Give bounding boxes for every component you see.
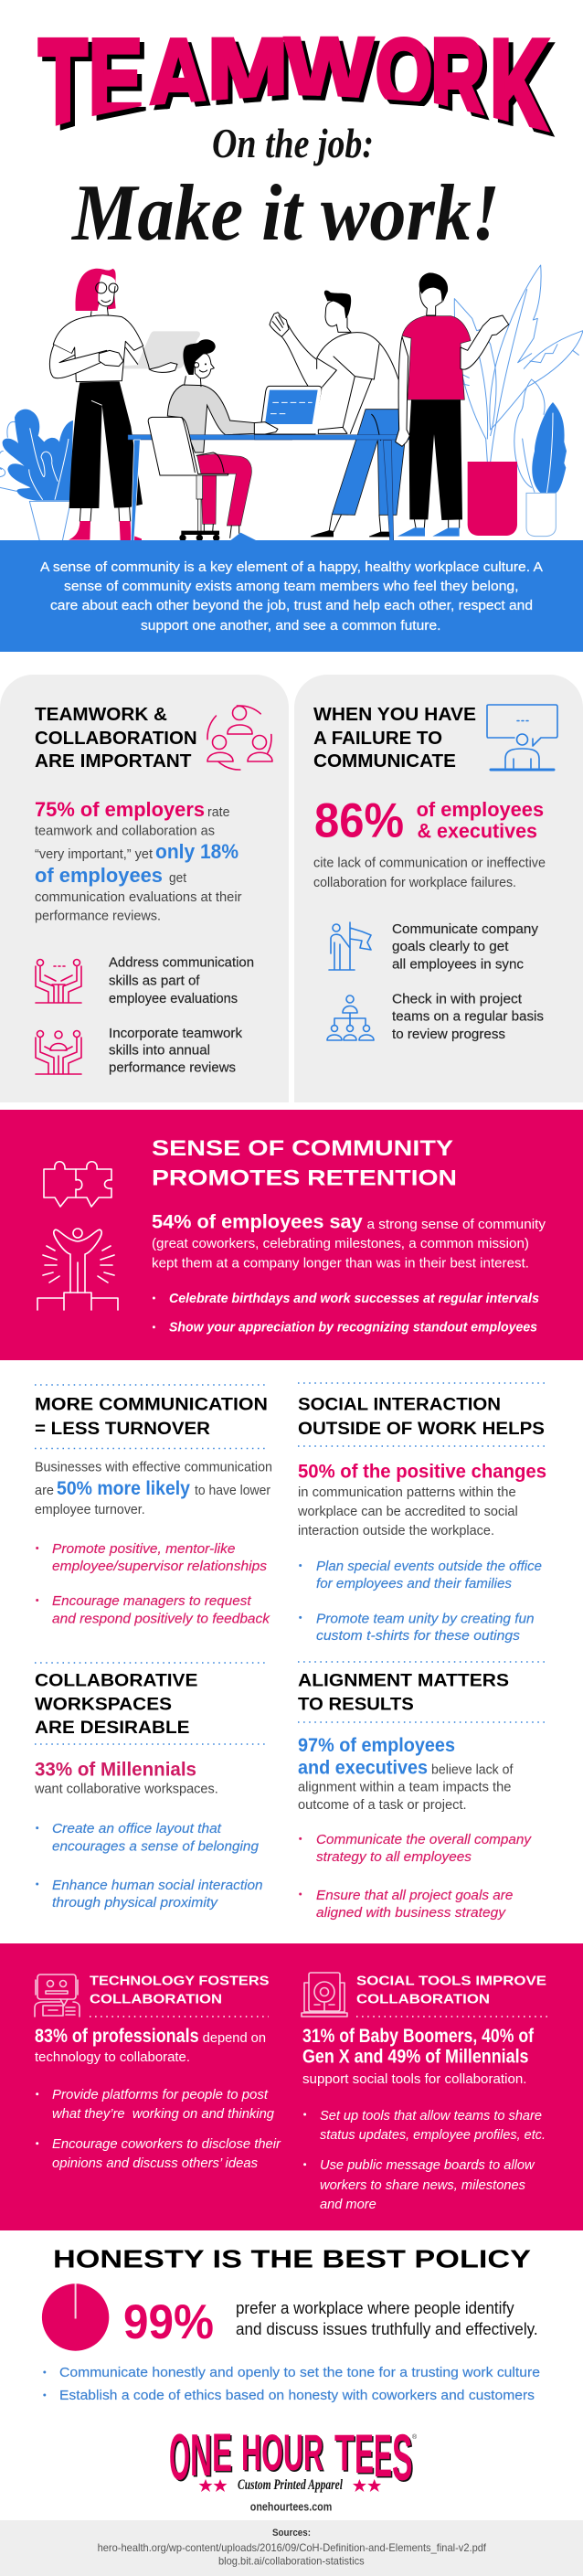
stat: 86 percent: cite lack of communication or ineffective — [313, 857, 546, 871]
stat: 33 percent of millennials — [34, 1760, 218, 1797]
bullets: plan and promote: for employees and their families — [316, 1577, 512, 1591]
stat: 99 percent: 99% — [123, 2295, 214, 2349]
panel: teamwork and collaboration — [0, 675, 289, 1102]
chart: 99 percent pie — [42, 2283, 109, 2351]
stat: 33 percent of millennials: want collaborative workspaces. — [34, 1783, 218, 1797]
bullets: set up and use — [303, 2108, 546, 2212]
heading: collaborative workspaces: ARE DESIRABLE — [35, 1719, 190, 1738]
stat: 75 percent of employers: of employees — [35, 864, 163, 887]
website url: onehourtees.com — [250, 2500, 332, 2514]
heading: alignment matters — [298, 1672, 509, 1715]
stat: 50 percent more likely: to have lower — [195, 1484, 270, 1498]
intro text: support one another, and see a common future. — [141, 619, 440, 633]
icon: celebrating person — [37, 1229, 118, 1310]
bullet text: check in — [392, 993, 544, 1042]
title: TEAMWORK: W — [290, 25, 377, 123]
bullets: celebrate and show — [153, 1291, 539, 1336]
logo: one hour tees: E — [214, 2424, 234, 2485]
heading: social tools — [356, 1975, 546, 2007]
panel: sense of community — [0, 1110, 583, 1360]
stat: 97 percent: and executives — [298, 1758, 428, 1779]
stat: 54 percent: a strong sense of community — [367, 1218, 546, 1232]
section: more communication less turnover — [35, 1385, 272, 1626]
title: TEAMWORK: M — [207, 20, 289, 121]
logo: one hour tees: S — [393, 2424, 414, 2496]
person: leaning man — [270, 291, 405, 537]
bullets: create and enhance — [36, 1822, 263, 1911]
heading: technology fosters: TECHNOLOGY FOSTERS — [90, 1975, 270, 1989]
bullets: celebrate and show: Show your appreciation by recognizing standout employees — [169, 1320, 537, 1336]
heading: alignment matters: TO RESULTS — [298, 1696, 414, 1715]
bullets: honesty: Establish a code of ethics based on honesty with coworkers and customers — [59, 2388, 535, 2403]
section: alignment matters — [298, 1662, 548, 1921]
footer: sources: hero-health.org/wp-content/uploads/2016/09/CoH-Definition-and-Elements_final-v2.pdf — [98, 2541, 487, 2554]
heading: failure: COMMUNICATE — [313, 751, 456, 772]
stat: 97 percent: 97% of employees — [298, 1735, 455, 1756]
bullet text: communicate company goals: all employees in sync — [392, 958, 524, 973]
bullets: celebrate and show: Celebrate birthdays and work successes at regular intervals — [169, 1291, 539, 1306]
logo: one hour tees: ® — [412, 2433, 418, 2441]
icon: robot — [35, 1975, 80, 2017]
stat: 50 percent more likely: Businesses with effective communication — [35, 1460, 272, 1474]
stat: 75 percent of employers: teamwork and collaboration as — [35, 825, 215, 839]
bullets: honesty — [43, 2365, 540, 2403]
section: social interaction — [297, 1383, 548, 1644]
heading: teamwork — [35, 705, 197, 772]
bullets: communicate and ensure: strategy to all employees — [316, 1850, 472, 1865]
title: TEAMWORK: R — [430, 16, 485, 142]
heading: more communication: MORE COMMUNICATION — [35, 1395, 268, 1415]
heading: social interaction: OUTSIDE OF WORK HELPS — [298, 1420, 545, 1439]
heading: social interaction: SOCIAL INTERACTION — [298, 1395, 501, 1415]
heading: teamwork: COLLABORATION — [35, 729, 197, 749]
stat: 54 percent: 54% of employees say — [152, 1211, 363, 1232]
heading: failure: WHEN YOU HAVE — [313, 705, 476, 725]
title: TEAMWORK: E — [92, 19, 147, 145]
heading: social tools: SOCIAL TOOLS IMPROVE — [356, 1975, 546, 1989]
heading: more communication: = LESS TURNOVER — [35, 1420, 210, 1439]
stat: 86 percent: collaboration for workplace failures. — [313, 876, 516, 890]
heading: alignment matters: ALIGNMENT MATTERS — [298, 1672, 509, 1691]
intro band — [0, 540, 583, 652]
stat: baby boomers gen x millennials — [302, 2026, 535, 2087]
stat: 50 percent more likely — [35, 1460, 272, 1517]
stat: baby boomers gen x millennials: Gen X and 49% of Millennials — [302, 2047, 528, 2068]
stat: 97 percent: alignment within a team impacts the — [298, 1781, 511, 1795]
bullets: promote and encourage: and respond positively to feedback — [52, 1612, 270, 1626]
bullets: communicate and ensure: Communicate the overall company — [316, 1833, 532, 1847]
heading: collaborative workspaces — [35, 1672, 197, 1738]
heading: collaborative workspaces: WORKSPACES — [35, 1696, 172, 1715]
stat: 86 percent: 86% — [314, 793, 404, 848]
logo: one hour tees: T — [336, 2424, 356, 2483]
bullet text: address communication: Address communication — [109, 956, 254, 971]
logo: one hour tees: E — [356, 2424, 375, 2486]
bullets: communicate and ensure: aligned with business strategy — [316, 1906, 506, 1921]
title: TEAMWORK: A — [153, 24, 213, 134]
stat: 54 percent — [152, 1211, 546, 1272]
icon: puzzle — [44, 1162, 111, 1207]
intro text: A sense of community is a key element of a happy, healthy workplace culture. A — [40, 560, 543, 575]
stat: 75 percent of employers: performance reviews. — [35, 909, 161, 923]
title: TEAMWORK: K — [490, 12, 549, 164]
stat: 54 percent: (great coworkers, celebrating milestones, a common mission) — [152, 1237, 529, 1251]
bullets: promote and encourage — [36, 1542, 270, 1626]
stat: 50 percent of positive changes: in communication patterns within the — [298, 1485, 516, 1500]
bullets: plan and promote: Promote team unity by creating fun — [316, 1612, 535, 1626]
stat: 83 percent: 83% of professionals — [35, 2026, 199, 2047]
panel: technology and social tools — [0, 1943, 583, 2230]
heading: teamwork: TEAMWORK & — [35, 705, 167, 725]
logo: one hour tees — [169, 2422, 418, 2496]
left half of scene — [0, 269, 292, 541]
heading: technology fosters: COLLABORATION — [90, 1993, 222, 2007]
bullet text: check in: teams on a regular basis — [392, 1010, 544, 1025]
bullets: provide and encourage: what they’re working on and thinking — [52, 2106, 275, 2122]
stat: 33 percent of millennials: 33% of Millennials — [35, 1760, 196, 1781]
desk: left part — [128, 435, 292, 541]
bullets: communicate and ensure — [299, 1833, 532, 1921]
stat: 83 percent: technology to collaborate. — [35, 2050, 190, 2065]
bullets: honesty: Communicate honestly and openly to set the tone for a trusting work culture — [59, 2365, 540, 2380]
laptop — [254, 386, 322, 434]
text: prefer a workplace — [236, 2299, 538, 2338]
heading: technology fosters — [90, 1975, 270, 2007]
logo: one hour tees: HOUR — [243, 2424, 325, 2483]
bullets: plan and promote: custom t-shirts for these outings — [316, 1629, 520, 1644]
bullets: promote and encourage: employee/supervisor relationships — [52, 1559, 267, 1574]
bullets: plan and promote — [299, 1559, 542, 1644]
logo: one hour tees: O — [170, 2423, 192, 2496]
stat: 50 percent of positive changes: workplace can be accredited to social — [297, 1505, 518, 1519]
bullet text: address communication: employee evaluations — [109, 992, 238, 1006]
intro text — [40, 560, 543, 633]
stat: 75 percent of employers: 75% of employers — [35, 798, 205, 821]
bullet text: communicate company goals — [392, 922, 539, 973]
person: seated man — [167, 339, 255, 452]
title: TEAMWORK — [37, 37, 556, 137]
bullet text: check in: to review progress — [392, 1027, 505, 1042]
right half of scene — [254, 265, 583, 541]
text: prefer a workplace: prefer a workplace where people identify — [236, 2299, 514, 2317]
bullets: create and enhance: Enhance human social interaction — [52, 1879, 263, 1893]
bullets: set up and use: Set up tools that allow teams to share — [320, 2108, 542, 2124]
icon: gear tablet — [302, 1973, 347, 2017]
illustration: team around desk — [0, 265, 583, 541]
stat: 97 percent — [298, 1735, 514, 1813]
bullet text: communicate company goals: Communicate company — [392, 922, 539, 937]
icon: people circle — [207, 706, 272, 770]
bullet text: check in: Check in with project — [392, 993, 522, 1007]
logo: one hour tees: Custom Printed Apparel — [238, 2477, 343, 2493]
stat: 50 percent of positive changes: 50% of the positive changes — [298, 1461, 546, 1482]
stat: 75 percent of employers: rate — [207, 805, 230, 820]
bullet text: incorporate teamwork: performance reviews — [109, 1061, 236, 1076]
stat: 50 percent of positive changes — [297, 1461, 546, 1538]
icon: hierarchy — [327, 995, 374, 1040]
logo: one hour tees: T — [334, 2423, 355, 2481]
logo: one hour tees: N — [192, 2422, 214, 2490]
footer: sources — [0, 2520, 583, 2576]
title: TEAMWORK: A — [148, 19, 208, 130]
icon: meeting two people — [36, 960, 81, 1003]
heading: honesty is the best policy: HONESTY IS THE BEST POLICY — [53, 2245, 531, 2273]
person: man in pink shirt — [396, 272, 509, 537]
subtitle: Make it work: Make it work! — [70, 169, 500, 258]
stat: 50 percent more likely: are — [35, 1484, 54, 1498]
heading: social interaction — [298, 1395, 545, 1439]
bullets: set up and use: status updates, employee profiles, etc. — [320, 2127, 546, 2143]
title: TEAMWORK: T — [38, 12, 88, 155]
stat: 75 percent of employers: get — [169, 871, 186, 886]
logo: one hour tees: S — [392, 2422, 413, 2495]
stat: 50 percent more likely: employee turnover. — [35, 1503, 145, 1517]
title: TEAMWORK: T — [43, 16, 92, 160]
intro text: care about each other beyond the job, trust and help each other, respect and — [50, 599, 533, 613]
text: prefer a workplace: and discuss issues truthfully and effectively. — [236, 2320, 538, 2338]
plant: right leaves and pots — [454, 265, 583, 537]
panel: failure to communicate — [294, 675, 583, 1102]
bullets: provide and encourage — [36, 2087, 281, 2171]
heading: social tools: COLLABORATION — [356, 1993, 490, 2007]
bullets: provide and encourage: opinions and discuss others’ ideas — [52, 2156, 258, 2171]
title: TEAMWORK: M — [212, 25, 293, 125]
title: TEAMWORK: O — [375, 19, 432, 124]
bullet text: address communication: skills as part of — [109, 974, 200, 989]
bullet text: incorporate teamwork: Incorporate teamwork — [109, 1027, 243, 1041]
plant: left blue leaves — [0, 410, 73, 541]
footer: sources: blog.bit.ai/collaboration-statistics — [218, 2555, 365, 2568]
icon: person with flag — [329, 922, 371, 970]
bullets: provide and encourage: Encourage coworkers to disclose their — [52, 2136, 281, 2152]
bullets: set up and use: Use public message boards to allow — [320, 2157, 535, 2173]
heading: sense of community: SENSE OF COMMUNITY — [152, 1136, 453, 1161]
heading: failure — [313, 705, 476, 772]
title: TEAMWORK: O — [380, 24, 437, 129]
title: TEAMWORK: K — [494, 16, 554, 168]
title: TEAMWORK: E — [88, 15, 143, 141]
bullets: set up and use: workers to share news, milestones — [320, 2177, 525, 2193]
title: TEAMWORK: R — [435, 21, 490, 146]
subtitle: On the job: On the job: — [212, 120, 374, 166]
logo: one hour tees: E — [375, 2422, 393, 2490]
stat: baby boomers gen x millennials: support social tools for collaboration. — [302, 2072, 526, 2087]
bullets: set up and use: and more — [320, 2197, 376, 2212]
stat: 75 percent of employers: only 18% — [155, 840, 238, 863]
stat: 83 percent: depend on — [203, 2031, 266, 2046]
intro text: sense of community exists among team members who feel they belong, — [64, 580, 519, 594]
stat: 50 percent more likely: 50% more likely — [57, 1478, 190, 1499]
logo: one hour tees: HOUR — [241, 2423, 323, 2481]
bullet text: address communication — [109, 956, 254, 1006]
bullets: communicate and ensure: Ensure that all project goals are — [316, 1889, 513, 1903]
stat: 86 percent: of employees — [417, 798, 544, 821]
heading: sense of community: PROMOTES RETENTION — [152, 1166, 457, 1191]
logo: one hour tees: N — [190, 2422, 212, 2488]
icon: meeting three people — [36, 1031, 81, 1074]
stat: 54 percent: kept them at a company longer than was in their best interest. — [152, 1257, 529, 1272]
bullets: promote and encourage: Encourage managers to request — [52, 1594, 252, 1609]
bullets: plan and promote: Plan special events outside the office — [316, 1559, 542, 1574]
bullets: promote and encourage: Promote positive, mentor-like — [52, 1542, 236, 1557]
title: TEAMWORK: W — [285, 20, 373, 119]
stat: 75 percent of employers: communication evaluations at their — [35, 890, 242, 905]
section: collaborative workspaces — [34, 1663, 269, 1911]
stat: 97 percent: outcome of a task or project. — [298, 1798, 467, 1813]
bullets: create and enhance: through physical proximity — [52, 1896, 218, 1911]
stat: 75 percent of employers: “very important,” yet — [35, 847, 153, 862]
logo: one hour tees: E — [355, 2423, 374, 2485]
stat: 86 percent — [313, 793, 546, 890]
stat: 75 percent of employers — [35, 798, 242, 923]
bullets: create and enhance: Create an office layout that — [52, 1822, 222, 1836]
bullet text: communicate company goals: goals clearly to get — [392, 940, 508, 954]
bullet text: incorporate teamwork — [109, 1027, 243, 1076]
bullets: provide and encourage: Provide platforms for people to post — [52, 2087, 269, 2102]
heading: collaborative workspaces: COLLABORATIVE — [35, 1672, 197, 1691]
chair and legs — [148, 417, 256, 541]
heading: sense of community — [152, 1136, 457, 1191]
bullet text: incorporate teamwork: skills into annual — [109, 1044, 210, 1059]
logo: one hour tees: E — [212, 2423, 232, 2483]
person: woman with tablet — [49, 269, 200, 541]
logo: one hour tees: E — [374, 2422, 392, 2489]
logo: one hour tees: O — [169, 2422, 190, 2494]
bullets: create and enhance: encourages a sense of belonging — [52, 1839, 259, 1854]
stat: 83 percent — [35, 2026, 266, 2065]
stat: 97 percent: believe lack of — [431, 1763, 514, 1778]
heading: more communication — [35, 1395, 268, 1439]
footer: sources: Sources: — [272, 2528, 311, 2539]
stat: baby boomers gen x millennials: 31% of Baby Boomers, 40% of — [302, 2026, 535, 2047]
stat: 50 percent of positive changes: interaction outside the workplace. — [298, 1524, 494, 1538]
heading: teamwork: ARE IMPORTANT — [35, 751, 192, 772]
desk: right part — [254, 435, 409, 541]
heading: failure: A FAILURE TO — [313, 729, 442, 749]
icon: speech bubble person — [487, 705, 557, 770]
stat: 86 percent: & executives — [417, 820, 537, 843]
